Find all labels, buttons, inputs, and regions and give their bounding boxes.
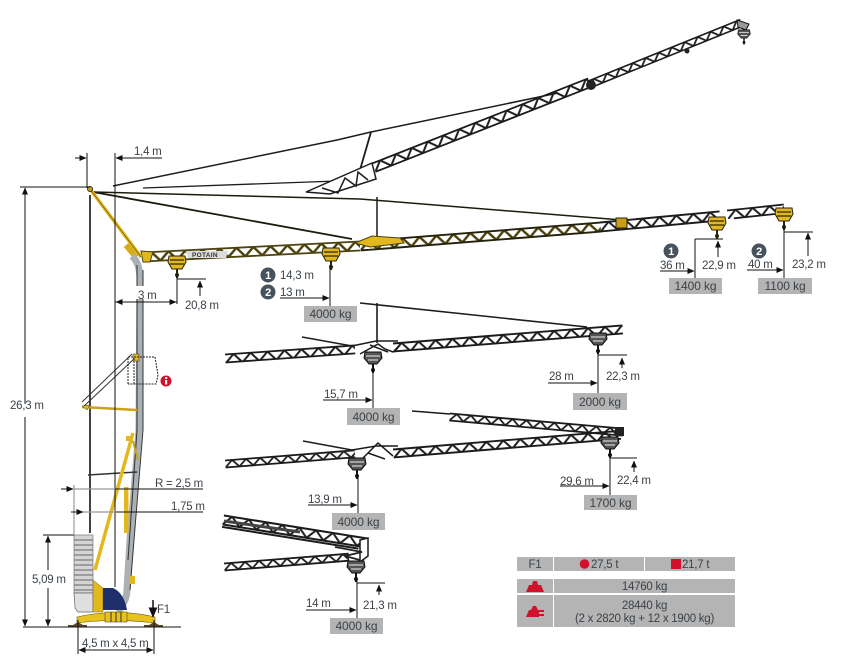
dimensions: main boom: 20,8 m xyxy=(185,300,219,312)
boom configuration 2: 28 m: 15,7 m xyxy=(324,389,358,401)
tower dimensions: 26,3 m xyxy=(10,400,44,412)
table: F1 and ballast: 21,7 t xyxy=(682,559,710,571)
boom configuration 2: 28 m: 22,3 m xyxy=(606,371,640,383)
dimensions: main boom: 1100 kg xyxy=(764,279,806,293)
boom configuration 3: 29,6 m xyxy=(225,411,651,530)
boom configuration 4: folded, 14 m: 14 m xyxy=(306,598,331,610)
tower dimensions: 1,4 m xyxy=(134,146,162,158)
dimensions: main boom: 1400 kg xyxy=(674,279,717,293)
dimensions: main boom: 40 m xyxy=(748,259,773,271)
dimensions: main boom: 14,3 m xyxy=(280,270,314,282)
slewing unit xyxy=(93,580,103,612)
boom configuration 2: 28 m: 28 m xyxy=(549,371,574,383)
boom configuration 3: 29,6 m: 4000 kg xyxy=(337,515,380,529)
tower dimensions: 5,09 m xyxy=(32,574,66,586)
main horizontal boom with yellow sections: POTAIN xyxy=(192,252,218,259)
tower dimensions: F1 xyxy=(157,604,170,616)
tower dimensions: R = 2,5 m xyxy=(155,478,203,490)
boom configuration 3: 29,6 m: 13,9 m xyxy=(308,494,342,506)
tower dimensions: 3 m xyxy=(138,290,156,302)
raised luffing boom configuration xyxy=(113,19,750,194)
boom configuration 3: 29,6 m: 29,6 m xyxy=(560,476,594,488)
dimensions: main boom: 1 xyxy=(668,246,674,258)
boom configuration 3: 29,6 m: 22,4 m xyxy=(617,475,651,487)
boom configuration 2: 28 m: 2000 kg xyxy=(579,395,621,409)
dimensions: main boom: 2 xyxy=(265,287,271,299)
tower dimensions xyxy=(10,146,205,654)
counterweight stack xyxy=(74,535,93,612)
base chassis xyxy=(77,612,155,623)
main horizontal boom with yellow sections xyxy=(93,192,793,278)
boom configuration 3: 29,6 m: 1700 kg xyxy=(589,496,632,510)
ballast motor housing blue xyxy=(103,588,127,610)
dimensions: main boom xyxy=(177,225,826,322)
dimensions: main boom: 2 xyxy=(756,246,762,258)
dimensions: main boom: 36 m xyxy=(660,260,685,272)
icon: info xyxy=(160,376,172,386)
dimensions: main boom: 23,2 m xyxy=(792,259,826,271)
table: F1 and ballast: 27,5 t xyxy=(591,559,619,571)
boom configuration 2: 28 m xyxy=(225,303,640,425)
tower dimensions: 1,75 m xyxy=(171,501,205,513)
boom configuration 2: 28 m: 4000 kg xyxy=(352,410,395,424)
dimensions: main boom: 4000 kg xyxy=(309,307,352,321)
tower dimensions: 4,5 m x 4,5 m xyxy=(82,638,148,650)
table: F1 and ballast xyxy=(517,557,735,627)
boom configuration 4: folded, 14 m xyxy=(222,515,397,634)
boom configuration 4: folded, 14 m: 4000 kg xyxy=(335,619,378,633)
dimensions: main boom: 13 m xyxy=(280,287,305,299)
crane tower and base xyxy=(68,186,163,628)
table: F1 and ballast: 28440 kg xyxy=(622,600,667,612)
table: F1 and ballast: F1 xyxy=(529,559,541,571)
table: F1 and ballast: 14760 kg xyxy=(622,581,667,593)
icon: ballast xyxy=(526,606,544,617)
optional climbing frame dashed xyxy=(128,357,158,384)
dimensions: main boom: 22,9 m xyxy=(702,260,736,272)
boom configuration 4: folded, 14 m: 21,3 m xyxy=(363,600,397,612)
icon: counterweight xyxy=(526,581,544,592)
dimensions: main boom: 1 xyxy=(265,270,271,282)
table: F1 and ballast: (2 x 2820 kg + 12 x 1900 kg) xyxy=(575,613,714,625)
